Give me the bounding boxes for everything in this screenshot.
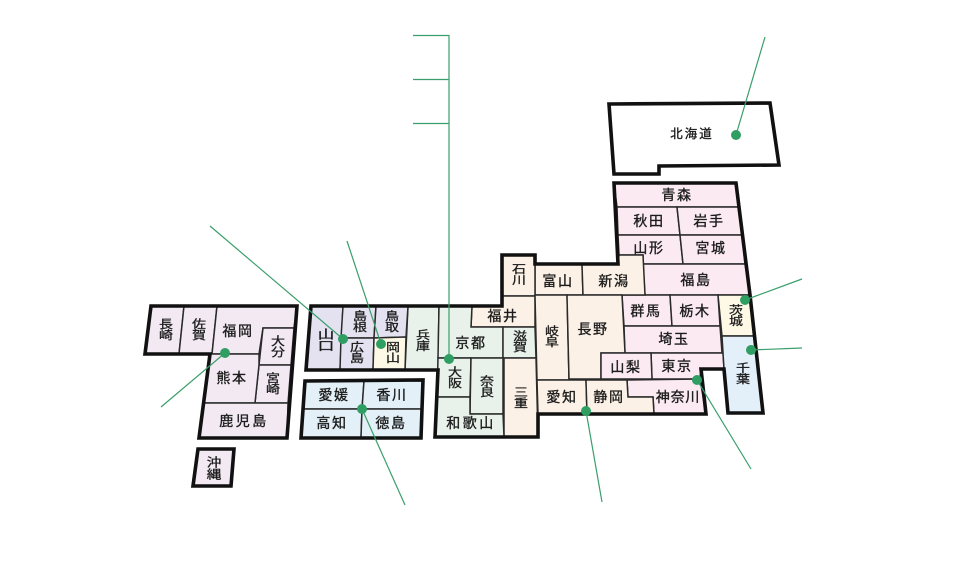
region: Kyushu: 鹿児島 <box>219 413 269 429</box>
region: Chubu: 新潟 <box>598 273 630 289</box>
leader: Shikoku <box>357 404 405 505</box>
region: Kanto: 群馬 <box>630 303 662 319</box>
region: Kanto <box>622 295 763 414</box>
leader: Hokkaido <box>731 37 765 140</box>
region: Chugoku: 鳥 <box>385 310 399 323</box>
region: Shikoku: 愛媛 <box>318 387 350 403</box>
region: Chubu: 愛知 <box>546 389 578 405</box>
region: Chubu: 石 <box>512 263 526 276</box>
region: Okinawa: 縄 <box>207 467 222 481</box>
region: Chubu: 長野 <box>577 321 609 337</box>
region: Chugoku: 島 <box>353 310 367 323</box>
region: Tohoku: 山形 <box>633 240 665 256</box>
leader: Osaka with three branches <box>413 36 454 364</box>
region: Shikoku: 香川 <box>376 387 408 403</box>
region: Shikoku: 高知 <box>316 415 348 431</box>
region: Chubu: 岐 <box>545 325 559 338</box>
leader: Tokyo <box>692 375 751 469</box>
region: Kanto: 城 <box>729 315 743 328</box>
region: Tohoku: 秋田 <box>633 213 665 229</box>
region: Chugoku: 岡 <box>386 341 400 354</box>
region: Kyushu: 福岡 <box>222 323 254 339</box>
region: Kinki: 奈 <box>480 375 494 388</box>
leader: Chiba <box>746 345 802 355</box>
region: Chubu <box>471 255 654 414</box>
leader: Kyushu <box>161 348 230 407</box>
region: Chugoku: 口 <box>318 340 334 353</box>
region: Kinki: 庫 <box>416 340 430 353</box>
region: Kinki: 京都 <box>455 335 487 351</box>
region: Kyushu: 宮 <box>266 371 280 385</box>
region: Kinki: 賀 <box>513 341 527 354</box>
region: Hokkaido: 北海道 <box>670 126 714 141</box>
region: Tohoku: 岩手 <box>693 213 725 229</box>
region: Kyushu: 長 <box>159 318 173 331</box>
region: Shikoku: 徳島 <box>375 415 407 431</box>
region: Kyushu: 佐 <box>192 318 206 331</box>
region: Kyushu: 賀 <box>192 329 206 342</box>
leader: Aichi <box>581 406 602 502</box>
region: Okinawa: 沖 <box>207 455 221 469</box>
region: Kyushu: 熊本 <box>216 370 248 386</box>
region: Kyushu: 大 <box>271 335 285 348</box>
region: Kinki: 大 <box>448 366 462 379</box>
region: Hokkaido <box>609 103 779 174</box>
region: Okinawa <box>193 449 234 486</box>
region: Kinki: 滋 <box>513 330 527 343</box>
region: Kinki: 良 <box>480 386 494 399</box>
region: Chugoku: 取 <box>385 321 399 334</box>
region: Chugoku <box>306 306 408 370</box>
region: Kanto: 千 <box>736 362 750 375</box>
leader: Yamaguchi <box>210 226 348 344</box>
region: Chugoku: 根 <box>353 321 367 334</box>
region: Chubu: 福井 <box>487 308 519 324</box>
region: Kyushu: 分 <box>271 346 285 359</box>
region: Shikoku <box>301 380 423 438</box>
region: Kyushu <box>145 306 297 438</box>
region: Kinki: 阪 <box>448 377 462 390</box>
outline: Honshu <box>306 183 763 437</box>
region: Chugoku: 山 <box>318 328 334 342</box>
region: Tohoku: 福島 <box>680 272 712 288</box>
region: Chugoku: 広 <box>350 341 364 354</box>
region: Chugoku: 山 <box>386 352 400 365</box>
region: Kyushu: 崎 <box>159 329 173 342</box>
region: Chubu: 阜 <box>545 336 559 349</box>
region: Kinki: 兵 <box>416 329 430 342</box>
region: Kinki: 重 <box>514 397 528 410</box>
region: Chubu: 川 <box>512 274 526 287</box>
region: Kinki: 三 <box>514 386 528 399</box>
region: Kanto: 東京 <box>661 358 693 374</box>
region: Chubu: 山梨 <box>610 359 642 375</box>
region: Kanto: 埼玉 <box>658 331 690 347</box>
region: Kinki: 和歌山 <box>446 415 496 431</box>
region: Kanto: 栃木 <box>679 303 711 319</box>
region: Chubu: 富山 <box>542 273 574 289</box>
leader: Okayama <box>347 241 386 349</box>
region: Chugoku: 島 <box>350 352 364 365</box>
region: Kanto: 葉 <box>736 373 750 386</box>
region: Chubu: 静岡 <box>593 389 625 405</box>
region: Kanto: 神奈川 <box>656 389 700 405</box>
region: Kanto: 茨 <box>729 304 743 317</box>
region: Tohoku: 宮城 <box>695 240 727 256</box>
region: Kinki <box>405 306 538 437</box>
region: Tohoku: 青森 <box>661 187 693 203</box>
region: Tohoku <box>614 183 750 295</box>
leader: Ibaraki <box>740 279 802 305</box>
region: Kyushu: 崎 <box>266 383 280 396</box>
